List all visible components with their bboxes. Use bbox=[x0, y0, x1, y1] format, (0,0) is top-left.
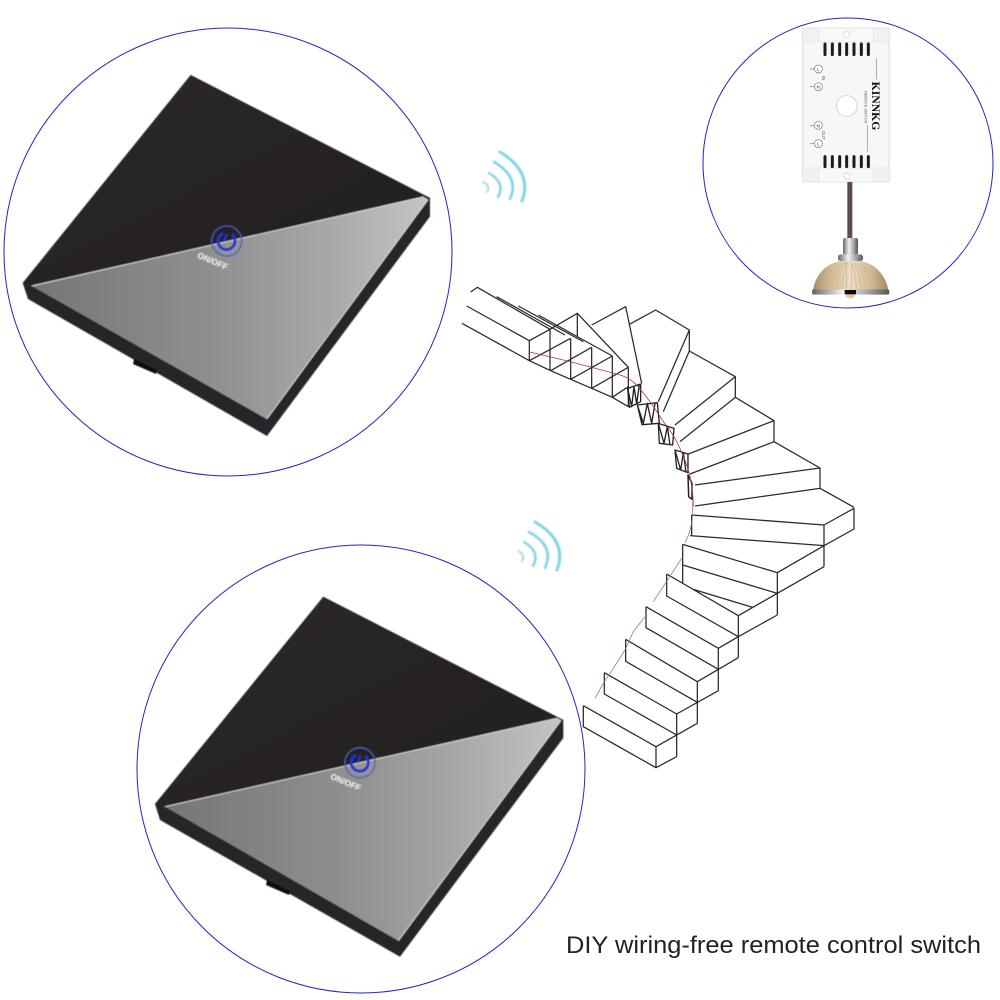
caption: DIY wiring-free remote control switch bbox=[566, 932, 981, 959]
on/off label: ON/OFF bbox=[329, 771, 362, 793]
zigzag risers bbox=[628, 384, 641, 407]
terminals bbox=[810, 65, 822, 148]
brand: KINNKG bbox=[869, 82, 883, 130]
icon: power button bbox=[345, 748, 375, 778]
centre button bbox=[836, 96, 857, 116]
cable bbox=[847, 182, 852, 239]
receiver module: N bbox=[817, 85, 821, 91]
upper flight and landing bbox=[462, 287, 854, 507]
wire bbox=[530, 352, 693, 507]
circle: receiver and lamp bbox=[703, 18, 993, 308]
receiver module: L bbox=[817, 142, 820, 148]
receiver module bbox=[802, 28, 890, 182]
lower flight bbox=[583, 500, 854, 768]
glass highlights bbox=[165, 718, 561, 941]
black glass bbox=[155, 597, 563, 807]
bottom notch bbox=[266, 880, 290, 895]
switch body and edge bbox=[155, 597, 563, 957]
icon: power button bbox=[212, 226, 242, 256]
wire bbox=[595, 500, 693, 698]
glass highlights bbox=[32, 197, 428, 419]
vents bbox=[825, 44, 868, 167]
bottom notch bbox=[133, 359, 157, 374]
icon: wireless signal top bbox=[483, 152, 525, 201]
black glass bbox=[23, 75, 430, 286]
grey glass bbox=[165, 718, 561, 941]
circle: bottom switch bbox=[137, 545, 585, 993]
module body bbox=[802, 28, 890, 182]
on/off label: ON/OFF bbox=[196, 250, 229, 272]
panel: top-left wall switch bbox=[23, 75, 430, 436]
receiver module: OUT bbox=[821, 131, 826, 140]
grey glass bbox=[32, 197, 428, 419]
receiver module: N bbox=[817, 123, 821, 129]
receiver module: IN bbox=[821, 76, 826, 80]
receiver module: L bbox=[817, 67, 820, 73]
switch body and edge bbox=[23, 75, 430, 436]
pendant lamp bbox=[812, 238, 889, 298]
panel: bottom wall switch bbox=[155, 597, 563, 957]
receiver module: REMOTE SWITCH bbox=[864, 91, 868, 124]
icon: wireless signal bottom bbox=[518, 522, 560, 570]
staircase line drawing bbox=[462, 287, 854, 768]
circle: top-left switch bbox=[4, 28, 452, 476]
receiver module and pendant lamp bbox=[802, 28, 890, 298]
